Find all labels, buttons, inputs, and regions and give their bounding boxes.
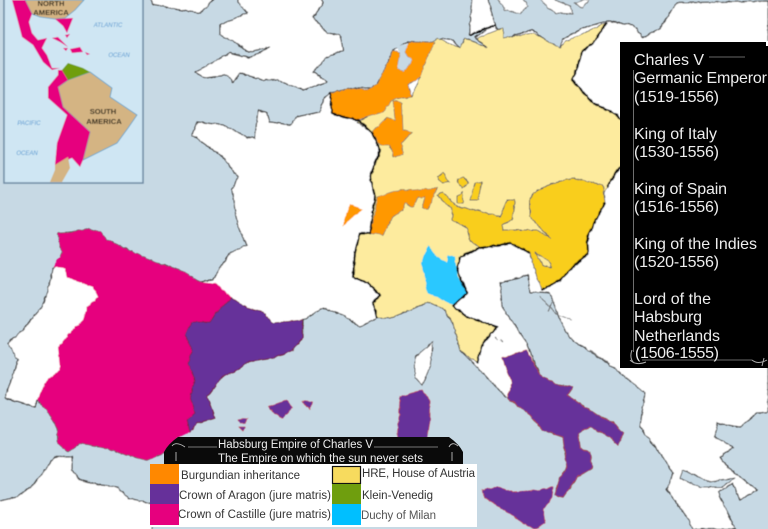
kingdom: Naples (502, 350, 623, 497)
land: Corsica (415, 342, 433, 385)
text: title list: Habsburg (634, 309, 702, 326)
text: title list: (1516-1556) (634, 199, 719, 216)
swatch: Duchy of Milan (332, 504, 361, 525)
legend header (164, 437, 463, 465)
inset: Patagonia (50, 157, 70, 182)
territory: House of Austria (437, 178, 605, 290)
swatch: HRE, House of Austria (332, 466, 360, 484)
inset: Spanish Caribbean (52, 34, 90, 55)
flourishes (630, 350, 767, 366)
label: Klein-Venedig: Klein-Venedig (362, 490, 433, 502)
coast: Dalmatian details (495, 296, 610, 364)
inset: Klein-Venedig (62, 63, 90, 80)
kingdom: Sardinia (397, 390, 430, 440)
inset ocean labels: ATLANTIC (93, 23, 123, 29)
land: British Isles (195, 0, 343, 90)
subtitle: The Empire on which the sun never sets (218, 453, 423, 465)
territory: Duchy of Milan (421, 245, 467, 305)
territory: Luxembourg and Lorraine (372, 100, 412, 157)
kingdom: Aragon in Iberia (185, 298, 303, 432)
text: title list: King of the Indies (634, 236, 757, 253)
territory: Austrian enclaves (437, 172, 482, 203)
territory: Holy Roman Empire (353, 22, 635, 363)
land: Baltic islands (497, 0, 590, 14)
land: Denmark (470, 0, 495, 35)
text: title list: King of Spain (634, 181, 727, 198)
label: Burgundian inheritance: Burgundian inheritance (181, 470, 300, 482)
text: title list: King of Italy (634, 126, 717, 143)
kingdom: Castile (37, 229, 232, 460)
border: empire frontier (330, 22, 620, 363)
kingdom: Balearic Islands (238, 400, 312, 431)
territory: Franche-Comte (370, 188, 437, 235)
inset: North America land (25, 0, 84, 19)
sea: Gulf of Corinth (680, 470, 735, 487)
inset ocean labels: OCEAN (108, 53, 130, 59)
inset labels: AMERICA (33, 8, 69, 17)
inset map: the Americas (4, 0, 143, 183)
land: North Africa (0, 457, 152, 529)
panel: titles of Charles V (620, 41, 768, 368)
text: title list: Netherlands (634, 328, 720, 345)
inset labels: AMERICA (86, 117, 122, 126)
legend (150, 464, 477, 527)
swatch: Crown of Castille (150, 504, 179, 525)
text: title list (634, 52, 768, 362)
inset ocean labels: OCEAN (16, 151, 38, 157)
text: title list: (1506-1555) (635, 345, 719, 362)
inset labels (33, 0, 122, 126)
text: title list: Lord of the (634, 291, 711, 308)
swatch: Klein-Venedig (332, 484, 361, 504)
label: HRE, House of Austria: HRE, House of Austria (362, 468, 476, 480)
label: Crown of Castille: Crown of Castille (jure matris) (178, 509, 331, 521)
territory: Charolais (343, 204, 363, 226)
label: Duchy of Milan: Duchy of Milan (361, 510, 436, 522)
sea: Zuiderzee (395, 44, 412, 72)
inset ocean labels: PACIFIC (17, 121, 41, 127)
label: Crown of Aragon: Crown of Aragon (jure matris) (179, 490, 331, 502)
inset: Spanish South America (48, 70, 90, 167)
inset: South America land (58, 72, 137, 160)
text: title list: (1520-1556) (634, 254, 719, 271)
kingdom: Sicily (482, 487, 553, 529)
text: title list: Charles V (634, 52, 704, 69)
text: title list: (1519-1556) (634, 89, 719, 106)
land: Ireland fragment (150, 0, 213, 13)
swatch: Crown of Aragon (150, 484, 179, 504)
inset labels: SOUTH (90, 107, 116, 116)
text: title list: Germanic Emperor (634, 70, 768, 87)
inset: Florida (55, 18, 73, 33)
inset ocean labels (16, 23, 130, 157)
territory: Burgundian Netherlands (330, 42, 435, 120)
inset: Spanish Mexico and Central America (12, 0, 60, 70)
text: title list: (1530-1556) (634, 144, 719, 161)
title: Habsburg Empire of Charles V (218, 439, 373, 451)
swatch: Burgundian inheritance (150, 464, 179, 484)
